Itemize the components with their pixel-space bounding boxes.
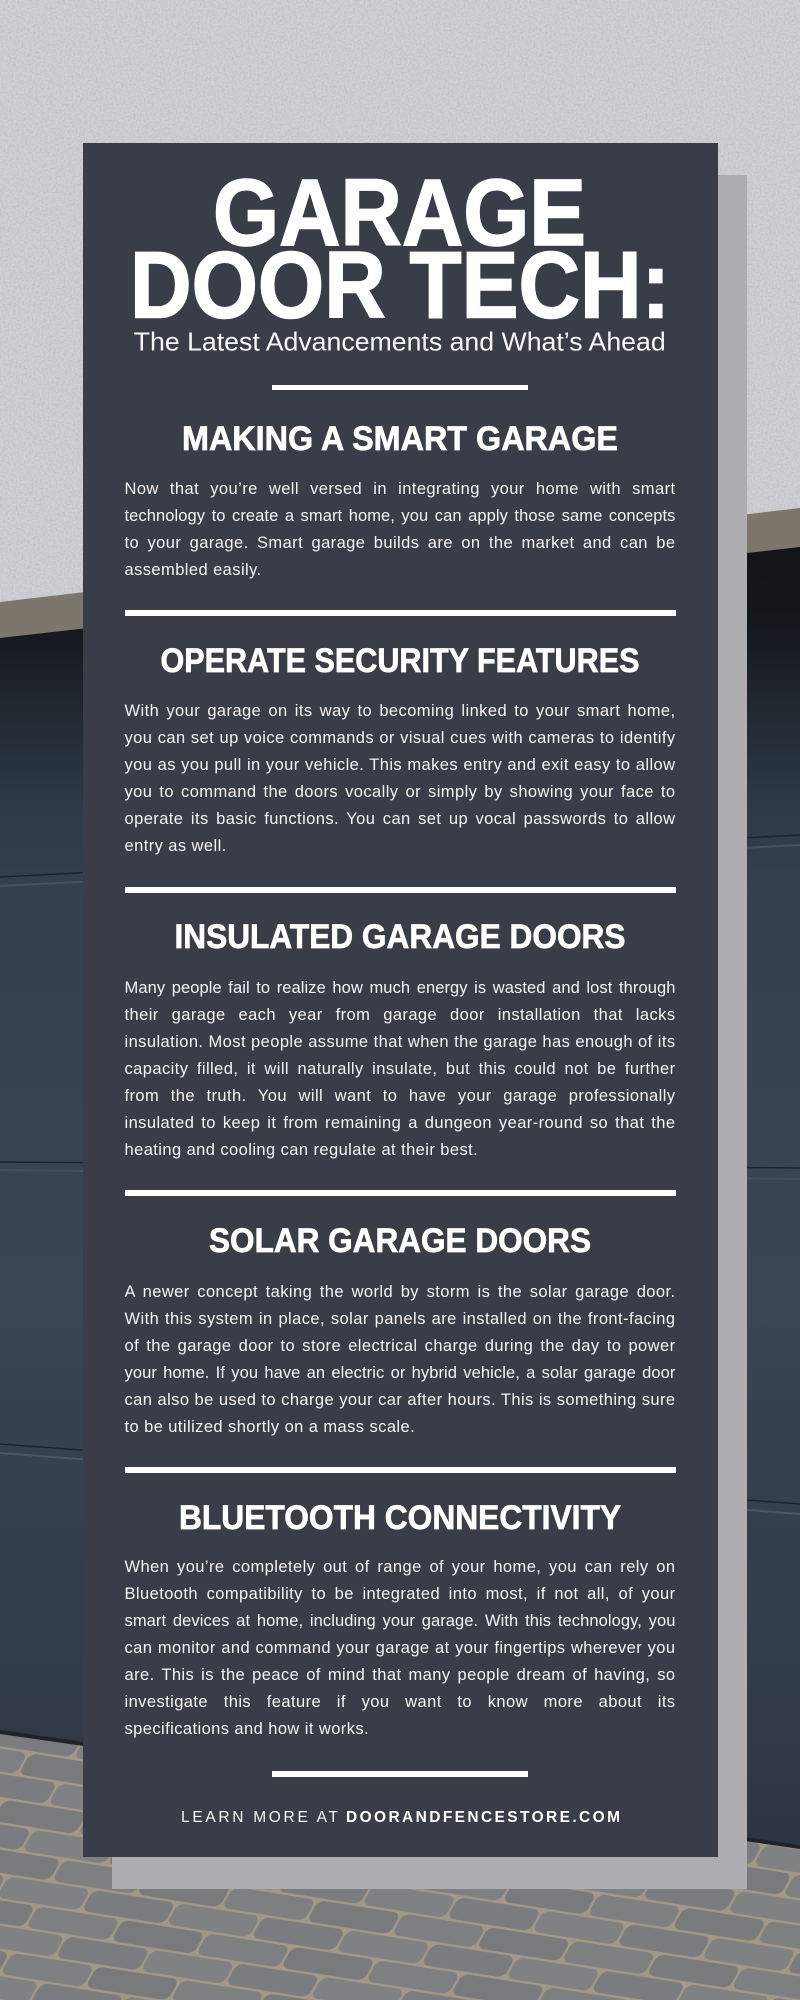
heading: INSULATED GARAGE DOORS — [174, 918, 625, 956]
section: bluetooth connectivity — [124, 1499, 676, 1738]
footer call to action: LEARN MORE AT — [181, 1809, 339, 1826]
divider — [124, 610, 676, 616]
body text: insulation. Most people assume that when the garage has enough of its — [124, 1033, 676, 1051]
divider — [124, 887, 676, 892]
footer call to action — [181, 1809, 620, 1826]
main panel — [83, 143, 718, 1857]
body text: heating and cooling can regulate at their best. — [124, 1141, 478, 1159]
body text: you to command the doors vocally or simply by showing your face to — [124, 783, 676, 801]
heading: MAKING A SMART GARAGE — [182, 420, 618, 458]
divider — [124, 1467, 676, 1473]
body text — [124, 480, 676, 579]
title — [130, 160, 670, 338]
body text: Many people fail to realize how much energy is wasted and lost through — [124, 979, 676, 997]
body text: can monitor and command your garage at your fingertips wherever you — [124, 1639, 676, 1657]
body text — [124, 702, 676, 855]
body text: With this system in place, solar panels are installed on the front-facing — [124, 1310, 676, 1328]
section: solar garage doors — [124, 1222, 676, 1436]
body text: you as you pull in your vehicle. This makes entry and exit easy to allow — [124, 756, 676, 774]
body text: insulated to keep it from remaining a dungeon year-round so that the — [124, 1114, 676, 1132]
body text: are. This is the peace of mind that many people dream of having, so — [124, 1666, 676, 1684]
title: DOOR TECH: — [130, 232, 670, 338]
door — [0, 540, 800, 1860]
body text: investigate this feature if you want to know more about its — [124, 1693, 676, 1711]
body text: Bluetooth compatibility to be integrated into most, if not all, of your — [124, 1585, 676, 1603]
body text — [124, 1283, 676, 1436]
footer call to action: DOORANDFENCESTORE.COM — [346, 1809, 620, 1826]
body text: smart devices at home, including your garage. With this technology, you — [124, 1612, 676, 1630]
section: insulated garage doors — [124, 918, 676, 1159]
paving — [0, 1731, 800, 2000]
divider — [272, 1771, 528, 1777]
body text: can also be used to charge your car after hours. This is something sure — [124, 1391, 676, 1409]
heading: BLUETOOTH CONNECTIVITY — [178, 1499, 621, 1537]
body text: capacity filled, it will naturally insulate, but this could not be further — [124, 1060, 676, 1078]
heading: OPERATE SECURITY FEATURES — [160, 642, 639, 680]
subtitle: The Latest Advancements and What’s Ahead — [134, 326, 666, 356]
body text: specifications and how it works. — [124, 1720, 369, 1738]
body text: Now that you’re well versed in integrating your home with smart — [124, 480, 676, 498]
title: GARAGE — [213, 160, 586, 266]
body text: operate its basic functions. You can set up vocal passwords to allow — [124, 810, 676, 828]
body text: of the garage door to store electrical charge during the day to power — [124, 1337, 676, 1355]
heading: SOLAR GARAGE DOORS — [208, 1222, 590, 1260]
section: operate security features — [124, 642, 676, 855]
body text: assembled easily. — [124, 561, 262, 579]
body text: to your garage. Smart garage builds are on the market and can be — [124, 534, 676, 552]
body text — [124, 1558, 676, 1738]
body text: entry as well. — [124, 837, 227, 855]
body text: your home. If you have an electric or hybrid vehicle, a solar garage door — [124, 1364, 676, 1382]
body text: their garage each year from garage door installation that lacks — [124, 1006, 676, 1024]
body text: technology to create a smart home, you can apply those same concepts — [124, 507, 676, 525]
door section joints — [0, 835, 800, 1514]
divider — [272, 384, 528, 390]
body text — [124, 979, 676, 1159]
section: making a smart garage — [124, 420, 676, 579]
body text: When you’re completely out of range of your home, you can rely on — [124, 1558, 676, 1576]
panel shadow — [112, 175, 747, 1889]
body text: to be utilized shortly on a mass scale. — [124, 1418, 415, 1436]
wall — [0, 0, 800, 660]
divider — [124, 1190, 676, 1196]
body text: from the truth. You will want to have your garage professionally — [124, 1087, 676, 1105]
body text: you can set up voice commands or visual cues with cameras to identify — [124, 729, 676, 747]
lintel band — [0, 508, 800, 638]
body text: A newer concept taking the world by storm is the solar garage door. — [124, 1283, 676, 1301]
body text: With your garage on its way to becoming linked to your smart home, — [124, 702, 676, 720]
